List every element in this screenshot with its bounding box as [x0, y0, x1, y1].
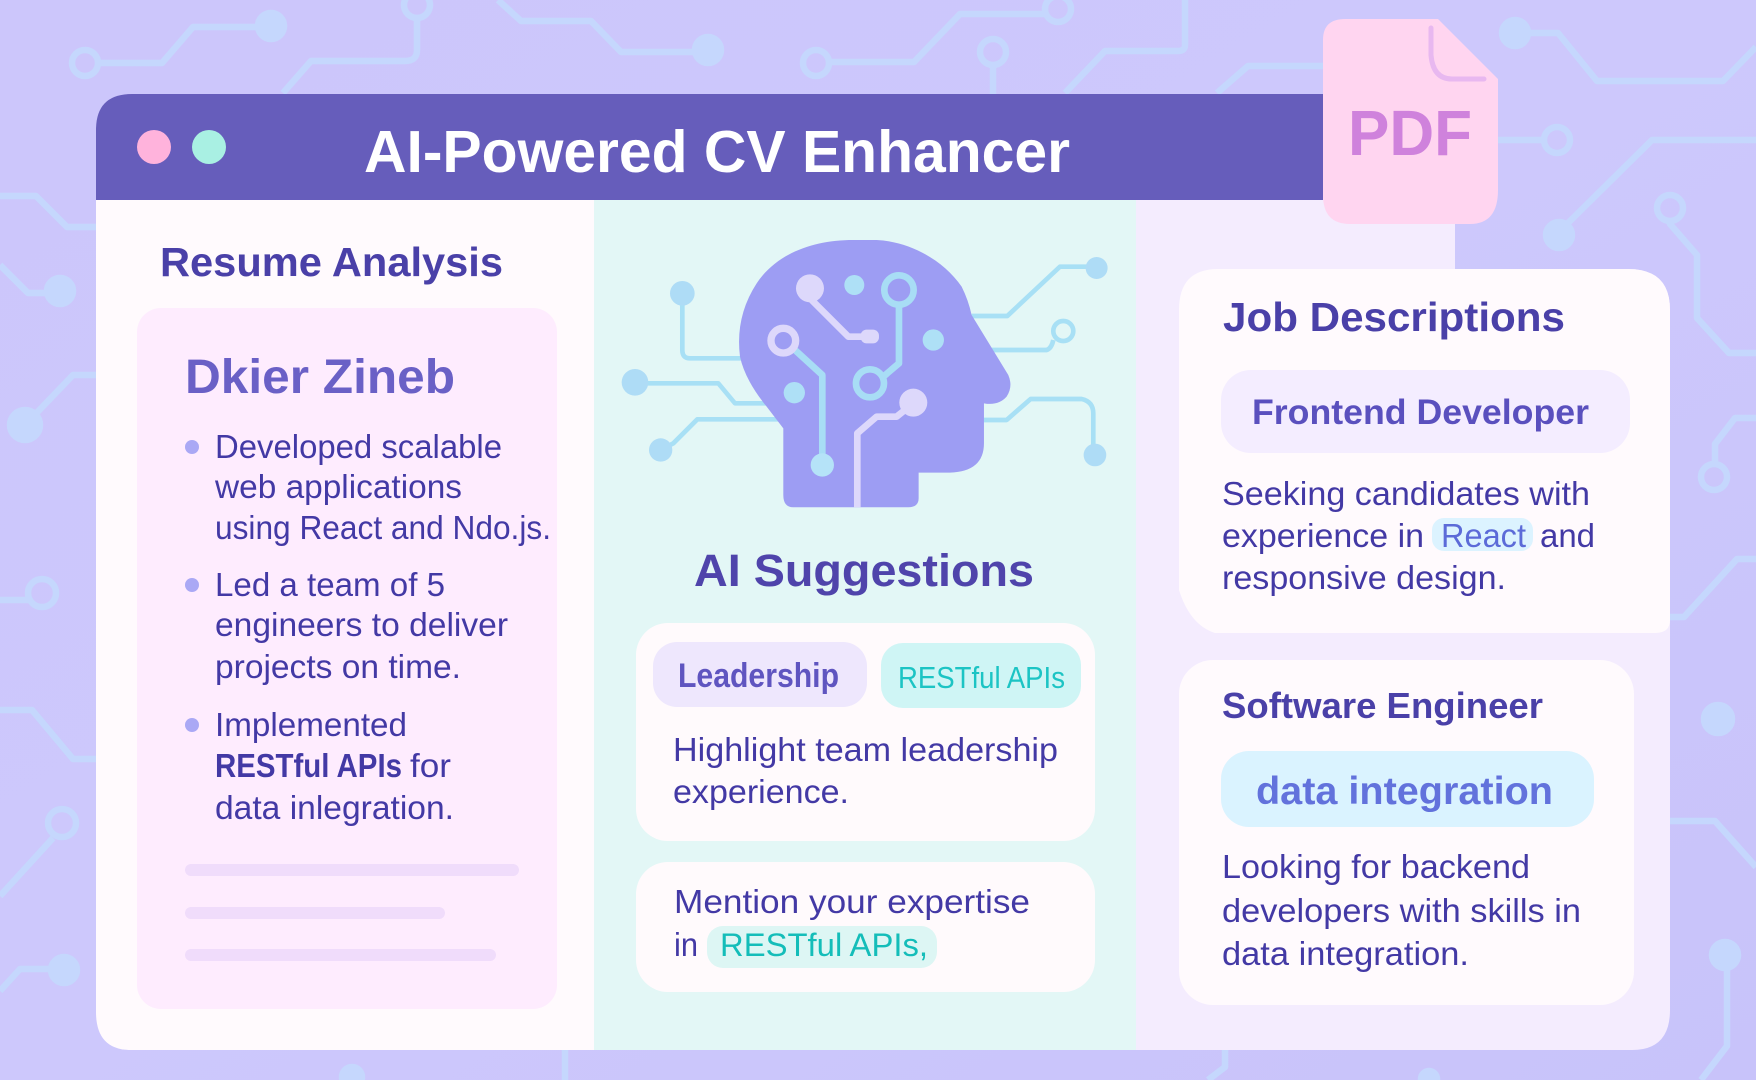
job text one: responsive design.: [1222, 559, 1506, 596]
title: AI-Powered CV Enhancer: [364, 119, 1070, 185]
heading: software engineer: Software Engineer: [1222, 685, 1543, 726]
panel: left column background: [96, 190, 594, 1050]
inner lilac nodes: [796, 274, 927, 417]
job card one: [1179, 269, 1670, 633]
head silhouette: [739, 240, 1010, 507]
bullet three: for: [410, 747, 451, 784]
suggestion card two: Mention your expertise: [674, 883, 1030, 920]
bullet three: RESTful APIs: [215, 747, 402, 784]
suggestion text: experience.: [673, 773, 849, 810]
tag: RESTful APIs: [881, 643, 1081, 708]
job text one: experience in: [1222, 517, 1424, 554]
role tag: frontend developer: [1221, 370, 1630, 453]
job text two: Looking for backend: [1222, 848, 1530, 885]
suggestion text: Highlight team leadership: [673, 731, 1058, 768]
bullet one: using React and Ndo.js.: [215, 509, 551, 546]
suggestion card one: [636, 623, 1095, 841]
bullet one: [185, 428, 551, 546]
tag: RESTful APIs inline: RESTful APIs,: [720, 927, 928, 963]
bullet three: [185, 706, 454, 826]
job text two: developers with skills in: [1222, 892, 1581, 929]
icon: PDF file: [1323, 19, 1498, 224]
panel: resume analysis: [137, 239, 557, 1009]
job text two: data integration.: [1222, 935, 1469, 972]
bullet one: web applications: [214, 468, 462, 505]
bullet two: [185, 566, 508, 685]
panel: AI suggestions: [636, 545, 1095, 992]
app window: [96, 94, 1670, 1050]
heading: AI suggestions: AI Suggestions: [694, 545, 1034, 596]
window button: pink: [137, 130, 171, 164]
tag: leadership: [653, 642, 867, 707]
heading: job descriptions: Job Descriptions: [1223, 294, 1565, 340]
role tag: frontend developer: Frontend Developer: [1252, 393, 1589, 432]
resume card: [137, 308, 557, 1009]
tag: RESTful APIs: RESTful APIs: [898, 660, 1065, 695]
bullet two: projects on time.: [215, 648, 461, 685]
panel: right column background: [1136, 190, 1670, 1050]
bullet three: data inlegration.: [215, 789, 454, 826]
panel: middle column background: [594, 190, 1136, 1050]
outer circuit nodes: [622, 257, 1108, 466]
outer circuit lines: [635, 267, 1097, 455]
bullet one: Developed scalable: [215, 428, 502, 465]
heading: resume analysis: Resume Analysis: [160, 239, 503, 285]
job text one: [1222, 475, 1595, 596]
skill tag: data integration: [1221, 751, 1594, 827]
icon: AI head with circuits: [622, 240, 1108, 507]
job text one: Seeking candidates with: [1222, 475, 1590, 512]
icon: PDF file: PDF: [1348, 97, 1472, 169]
inner blue circuits: [795, 275, 914, 465]
placeholder text lines: [185, 864, 519, 961]
inner lilac circuits: [771, 300, 913, 507]
panel: job descriptions: [1179, 269, 1670, 1005]
job text two: [1222, 848, 1581, 972]
candidate name: Dkier Zineb: [185, 351, 455, 404]
job text one: React: [1441, 517, 1526, 554]
tag: leadership: Leadership: [678, 657, 839, 695]
bullet two: engineers to deliver: [215, 606, 508, 643]
suggestion card two: [636, 862, 1095, 992]
window button: mint: [192, 130, 226, 164]
inner blue nodes: [784, 275, 944, 477]
bullet two: Led a team of 5: [215, 566, 445, 603]
title bar: [96, 94, 1323, 200]
job text one: and: [1540, 517, 1595, 554]
job card two: [1179, 660, 1634, 1005]
skill tag: data integration: data integration: [1256, 770, 1553, 813]
bullet three: Implemented: [215, 706, 407, 743]
suggestion card two: in: [674, 926, 698, 963]
suggestion text: [673, 731, 1058, 810]
